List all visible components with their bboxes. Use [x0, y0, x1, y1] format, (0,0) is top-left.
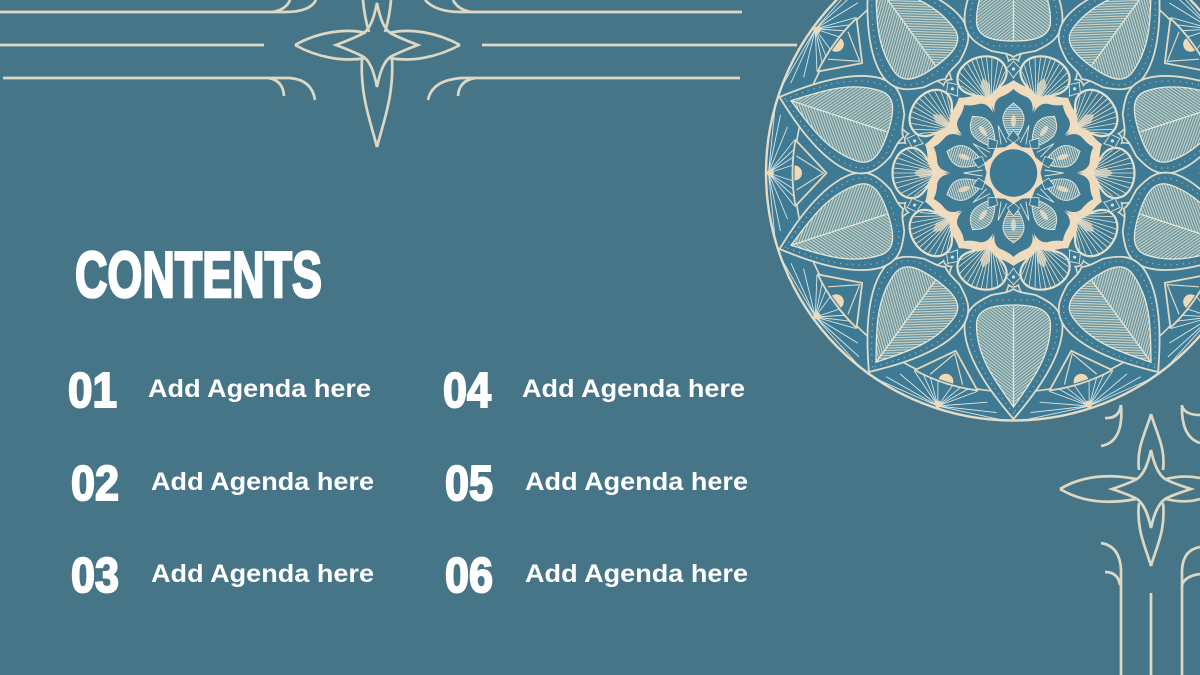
inner hatched petals: [941, 103, 1086, 243]
mandala: [764, 0, 1200, 429]
small knots between fans: [897, 53, 1130, 293]
ornament: top-left star with flanking lines: [0, 0, 797, 147]
agenda item 02: Add Agenda here: [151, 468, 374, 496]
agenda item 03: 03: [71, 549, 119, 603]
agenda item 04: [443, 364, 745, 418]
agenda item 02: [71, 457, 374, 511]
title: CONTENTS: [75, 238, 322, 311]
upper curls: [1101, 405, 1200, 446]
star: four point centre: [336, 3, 418, 87]
agenda item 03: [71, 549, 374, 603]
petal: left: [295, 31, 366, 59]
petal: bottom: [362, 58, 392, 147]
line group: right lines: [425, 0, 797, 100]
petal: right: [1166, 477, 1200, 501]
agenda item 05: [445, 457, 748, 511]
agenda item 04: 04: [443, 364, 491, 418]
rim motifs: [767, 0, 1200, 429]
centre sun: [984, 142, 1043, 204]
ornament: bottom-right star with lines: [1060, 405, 1200, 675]
petal: top: [363, 0, 391, 32]
petal: left: [1060, 476, 1136, 502]
agenda item 05: Add Agenda here: [525, 468, 748, 496]
agenda item 03: Add Agenda here: [151, 560, 374, 588]
vertical lines: [1101, 543, 1200, 675]
star: four point centre: [1112, 450, 1191, 528]
agenda item 01: [68, 364, 371, 418]
agenda item 02: 02: [71, 457, 119, 511]
line group: left lines: [0, 0, 316, 100]
large hatched leaves: [764, 0, 1200, 419]
cream flower outline: [918, 80, 1109, 266]
agenda item 01: 01: [68, 364, 117, 418]
agenda item 06: 06: [445, 549, 493, 603]
petal: bottom: [1138, 503, 1164, 566]
agenda item 06: [445, 549, 748, 603]
agenda item 01: Add Agenda here: [148, 375, 371, 403]
petal: top: [1138, 414, 1164, 470]
agenda item 04: Add Agenda here: [522, 375, 745, 403]
agenda item 06: Add Agenda here: [525, 560, 748, 588]
petal: right: [389, 31, 460, 59]
fan petals: [892, 50, 1134, 296]
agenda item 05: 05: [445, 457, 493, 511]
mandala disc and rim: [766, 0, 1200, 420]
